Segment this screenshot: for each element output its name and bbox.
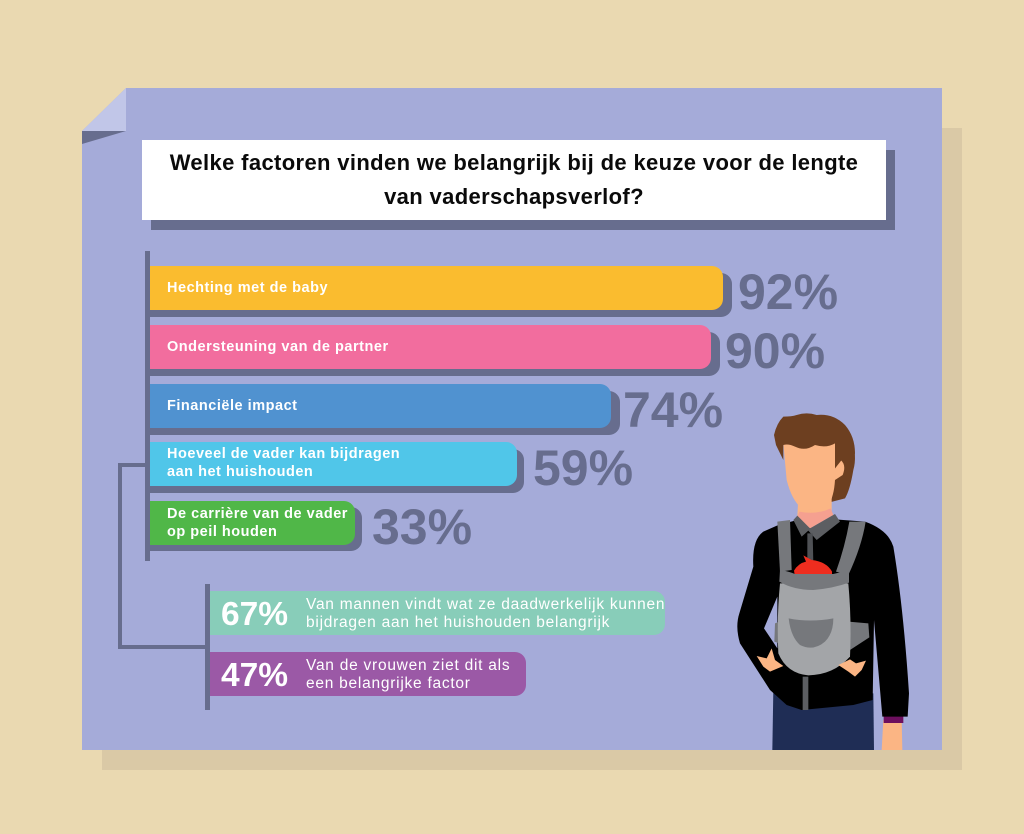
- title: van vaderschapsverlof?: [384, 184, 644, 209]
- face: [783, 440, 844, 509]
- title box shadow: [151, 150, 895, 230]
- bar: Financiele impact: 74%: [623, 382, 723, 438]
- chart axis: [145, 251, 150, 561]
- connector bracket: [118, 463, 207, 649]
- main panel: [82, 88, 942, 750]
- text men: bijdragen aan het huishouden belangrijk: [306, 614, 610, 631]
- torso and arms: [737, 519, 909, 717]
- page shadow: [102, 128, 962, 770]
- bar: Hoeveel de vader kan bijdragen: [150, 440, 633, 496]
- text men: Van mannen vindt wat ze daadwerkelijk kunnen: [306, 596, 665, 613]
- bar: Hoeveel de vader kan bijdragen: Hoeveel de vader kan bijdragen: [167, 446, 400, 462]
- hair back: [831, 437, 855, 502]
- carrier straps: [777, 520, 792, 572]
- text women: een belangrijke factor: [306, 675, 471, 692]
- bar: Hechting met de baby: Hechting met de baby: [167, 280, 328, 296]
- neck: [797, 497, 832, 528]
- title: [142, 140, 886, 220]
- bar: Financiele impact: Financiële impact: [167, 398, 298, 414]
- secondary axis: [205, 584, 210, 710]
- collar: [793, 514, 840, 540]
- bar: De carriere van de vader: op peil houden: [167, 524, 277, 540]
- right hand: [882, 720, 902, 750]
- bar: Financiele impact: [150, 382, 723, 438]
- bar: Hoeveel de vader kan bijdragen: 59%: [533, 440, 633, 496]
- text men: [306, 596, 665, 631]
- bar: De carriere van de vader: De carrière van de vader: [167, 506, 348, 522]
- bar: Hoeveel de vader kan bijdragen: aan het huishouden: [167, 464, 313, 480]
- callout: 47% women: [210, 652, 526, 696]
- left hand: [757, 648, 783, 672]
- callout: 67% men: [210, 591, 665, 635]
- bar: Ondersteuning van de partner: 90%: [725, 323, 825, 379]
- bar: Hechting met de baby: 92%: [738, 264, 838, 320]
- cuff: [884, 716, 903, 723]
- text women: Van de vrouwen ziet dit als: [306, 657, 510, 674]
- carrier body: [778, 583, 851, 675]
- right hand on carrier: [838, 659, 866, 677]
- carrier side flaps: [848, 622, 869, 650]
- bar: De carriere van de vader: [150, 499, 472, 555]
- illustration: father with baby carrier: [737, 413, 909, 750]
- baby head: [794, 555, 832, 577]
- carrier waist roll: [779, 570, 849, 590]
- value 47%: 47%: [221, 657, 288, 694]
- carrier pocket: [789, 618, 833, 648]
- pants: [772, 690, 874, 750]
- value 67%: 67%: [221, 596, 288, 633]
- bar: Ondersteuning van de partner: Ondersteuning van de partner: [167, 339, 389, 355]
- left inner arm gap: [764, 597, 777, 648]
- bar: De carriere van de vader: 33%: [372, 499, 472, 555]
- bar: Ondersteuning van de partner: [150, 323, 825, 379]
- hair: [774, 413, 855, 468]
- bar: Hechting met de baby: [150, 264, 838, 320]
- title: Welke factoren vinden we belangrijk bij de keuze voor de lengte: [170, 150, 858, 175]
- zip: [803, 677, 808, 710]
- text women: [306, 657, 510, 692]
- placket: [807, 533, 813, 563]
